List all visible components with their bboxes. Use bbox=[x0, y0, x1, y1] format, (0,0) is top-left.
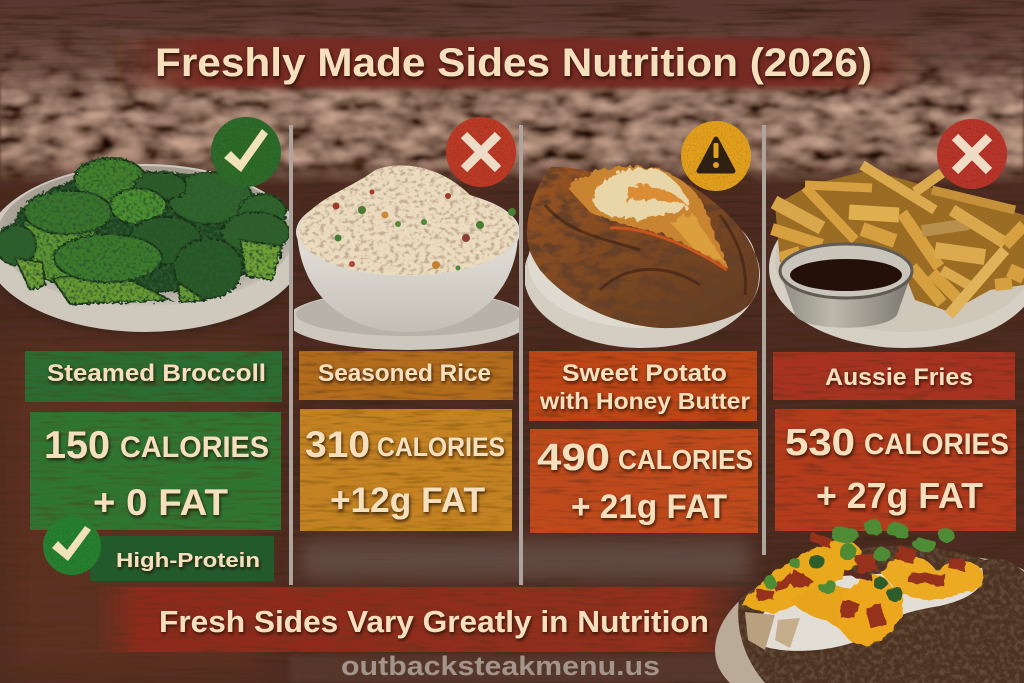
stat card: 150 calories, 0 fat: 150 bbox=[44, 424, 110, 467]
stat card: 490 calories, 21g fat: + 21g FAT bbox=[571, 488, 727, 526]
stat card: 530 calories, 27g fat: CALORIES bbox=[864, 428, 1009, 461]
stat card: 490 calories, 21g fat: 490 bbox=[537, 437, 610, 479]
stat card: 310 calories, 12g fat bbox=[300, 409, 512, 531]
photo: rice bowl on plate bbox=[286, 165, 530, 350]
stat card: 310 calories, 12g fat: +12g FAT bbox=[330, 481, 485, 520]
stat card: 530 calories, 27g fat bbox=[775, 409, 1016, 531]
label: Sweet Potato with Honey Butter: with Honey Butter bbox=[539, 388, 750, 414]
panel: aussie fries bbox=[769, 119, 1024, 531]
stat card: 150 calories, 0 fat bbox=[30, 412, 281, 530]
website url: outbacksteakmenu.us bbox=[341, 651, 660, 681]
label: Aussie Fries: Aussie Fries bbox=[825, 364, 973, 391]
title banner: Freshly Made Sides Nutrition (2026) bbox=[155, 41, 872, 85]
label: Steamed Broccoli bbox=[25, 351, 282, 402]
tag: High-Protein: High-Protein bbox=[116, 550, 260, 572]
label: Seasoned Rice: Seasoned Rice bbox=[318, 360, 491, 387]
photo: loaded baked potato bbox=[715, 518, 1024, 683]
label: Steamed Broccoli: Steamed Broccoll bbox=[47, 360, 266, 387]
panel: seasoned rice bbox=[286, 117, 530, 531]
stat card: 150 calories, 0 fat: + 0 FAT bbox=[93, 482, 228, 523]
stat card: 150 calories, 0 fat: CALORIES bbox=[120, 431, 269, 464]
tag: High-Protein bbox=[43, 517, 274, 581]
icon: check circle bbox=[43, 517, 101, 575]
photo: fries and dipping sauce bbox=[769, 165, 1024, 348]
stat card: 310 calories, 12g fat: 310 bbox=[305, 424, 370, 465]
bottom banner: key takeaway bbox=[95, 587, 750, 652]
icon: red X badge bbox=[937, 119, 1007, 189]
stat card: 490 calories, 21g fat: CALORIES bbox=[618, 444, 753, 475]
label: Seasoned Rice bbox=[299, 351, 513, 400]
stat card: 530 calories, 27g fat: + 27g FAT bbox=[816, 475, 983, 516]
photo: baked sweet potato on plate bbox=[524, 166, 760, 348]
photo: broccoli on plate bbox=[0, 158, 305, 334]
stat card: 530 calories, 27g fat: 530 bbox=[785, 422, 855, 464]
column dividers bbox=[289, 125, 766, 585]
label: Aussie Fries bbox=[773, 352, 1015, 400]
icon: warning badge bbox=[681, 121, 751, 191]
panel: steamed broccoli bbox=[0, 117, 305, 581]
label: Sweet Potato with Honey Butter bbox=[529, 351, 757, 421]
icon: green check badge bbox=[211, 117, 281, 187]
panel: sweet potato bbox=[524, 121, 760, 533]
stat card: 490 calories, 21g fat bbox=[530, 429, 758, 533]
icon: red X badge bbox=[446, 117, 516, 187]
label: Sweet Potato with Honey Butter: Sweet Potato bbox=[562, 360, 727, 387]
stat card: 310 calories, 12g fat: CALORIES bbox=[377, 432, 505, 462]
bottom banner: key takeaway: Fresh Sides Vary Greatly in Nutrition bbox=[159, 604, 709, 639]
